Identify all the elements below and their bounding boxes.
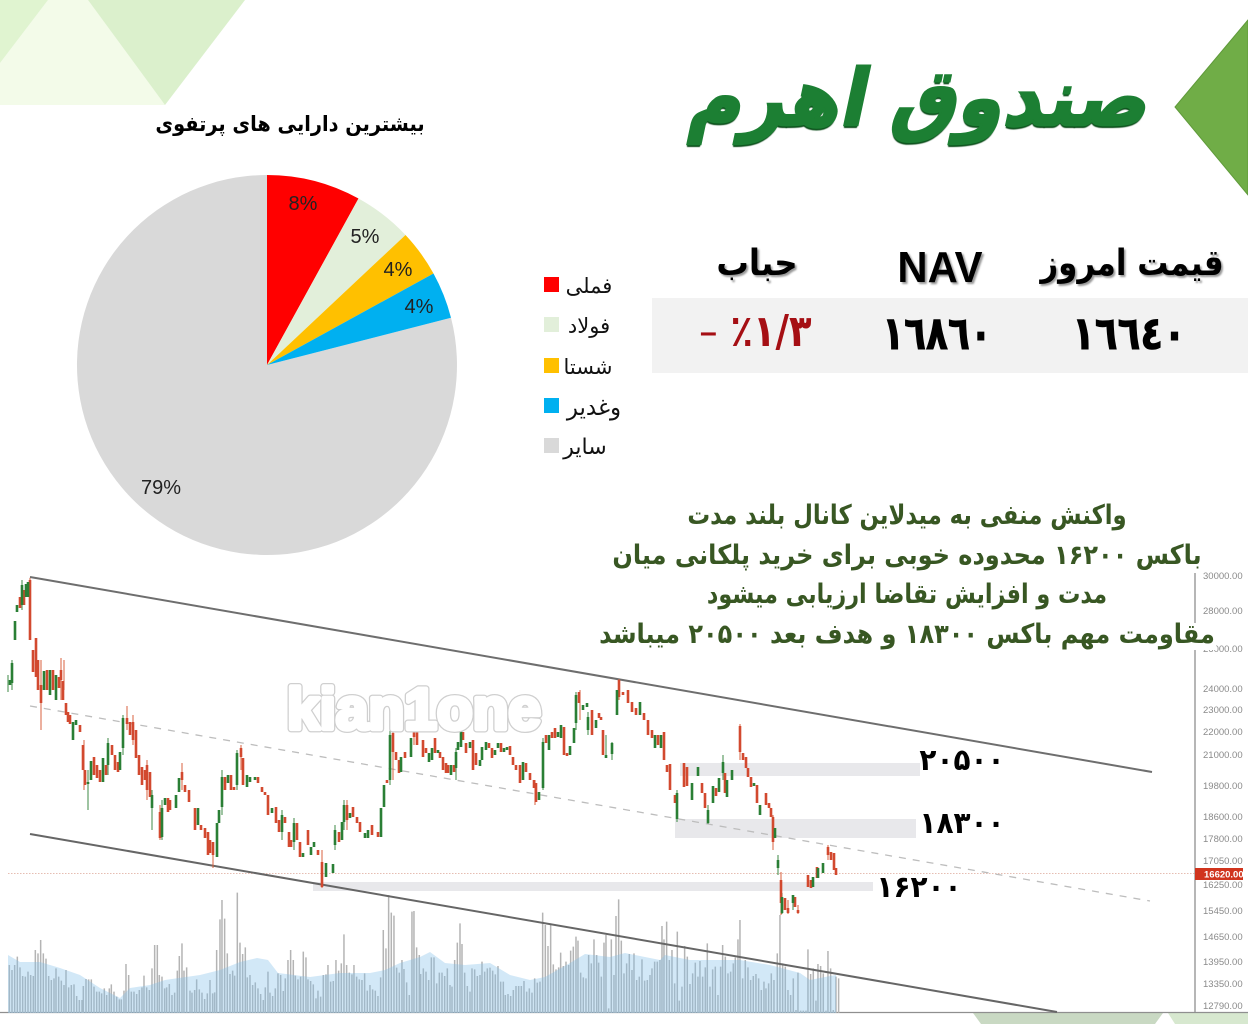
header: bubble: حباب xyxy=(716,243,798,284)
support and resistance zones xyxy=(313,763,920,891)
white cover behind commentary last line xyxy=(1100,623,1216,650)
price axis labels: 16250.00 xyxy=(1203,880,1243,891)
chart axes xyxy=(0,573,1248,1012)
slice: Femeli 8% xyxy=(267,175,358,365)
value: bubble: ٪۱/۳ – xyxy=(699,306,812,357)
pie percentage labels: 5% xyxy=(351,226,380,248)
price axis labels: 17050.00 xyxy=(1203,856,1243,867)
candlestick green bodies xyxy=(10,582,823,913)
price axis labels: 21000.00 xyxy=(1203,750,1243,761)
pie chart heading: بیشترین دارایی های پرتفوی xyxy=(155,112,425,136)
stats table xyxy=(652,243,1248,373)
analysis commentary xyxy=(599,500,1215,650)
pie legend: وغدیر xyxy=(567,395,621,421)
pie legend: فملی xyxy=(566,274,612,298)
header: NAV: NAV xyxy=(897,243,983,292)
slice: other 79% xyxy=(77,175,457,555)
analysis commentary: مدت و افزایش تقاضا ارزیابی میشود xyxy=(707,579,1107,610)
price axis labels: 14650.00 xyxy=(1203,932,1243,943)
analysis commentary: مقاومت مهم باکس ۱۸۳۰۰ و هدف بعد ۲۰۵۰۰ میباشد xyxy=(599,619,1215,650)
pie percentage labels xyxy=(141,193,434,499)
price axis labels: 17800.00 xyxy=(1203,834,1243,845)
price axis labels: 28000.00 xyxy=(1203,606,1243,617)
pie percentage labels: 79% xyxy=(141,477,181,499)
pie legend: فولاد xyxy=(568,314,610,338)
price axis labels: 13350.00 xyxy=(1203,979,1243,990)
candlestick red bodies xyxy=(20,580,836,913)
decorative green diamond right xyxy=(1174,19,1248,196)
price axis labels: 15450.00 xyxy=(1203,906,1243,917)
decorative bottom triangles xyxy=(973,1013,1248,1024)
current price tag: 16620.00 xyxy=(1204,870,1244,880)
value: today's price: ١٦٦٤٠ xyxy=(1072,306,1186,360)
current price dotted line xyxy=(8,872,1195,874)
watermark: kian1one xyxy=(287,677,541,742)
level label 20500: ۲۰۵۰۰ xyxy=(919,743,1005,778)
pie percentage labels: 8% xyxy=(289,193,318,215)
slice: Vaghadir 4% xyxy=(267,274,451,365)
pie legend: شستا xyxy=(563,355,613,379)
price axis labels: 30000.00 xyxy=(1203,571,1243,582)
price axis labels xyxy=(1203,571,1243,1012)
level label 16200: ۱۶۲۰۰ xyxy=(876,870,962,905)
header: today's price: قیمت امروز xyxy=(1040,243,1224,284)
pie legend xyxy=(544,274,621,460)
watermark: kian1one xyxy=(287,677,541,742)
price axis labels: 24000.00 xyxy=(1203,684,1243,695)
decorative green triangles top-left xyxy=(0,0,245,105)
value: NAV: ١٦٨٦٠ xyxy=(882,306,992,360)
pie percentage labels: 4% xyxy=(384,259,413,281)
level label 18300: ۱۸۳۰۰ xyxy=(919,806,1005,841)
slice: Shasta 4% xyxy=(267,235,434,365)
volume average area xyxy=(8,952,836,1013)
slice: Foolad 5% xyxy=(267,198,406,365)
price axis labels: 22000.00 xyxy=(1203,727,1243,738)
pie percentage labels: 4% xyxy=(405,296,434,318)
price axis labels: 18600.00 xyxy=(1203,812,1243,823)
title: صندوق اهرم xyxy=(682,54,1162,144)
analysis commentary: واکنش منفی به میدلاین کانال بلند مدت xyxy=(687,500,1127,531)
stats band xyxy=(652,298,1248,373)
price axis labels: 13950.00 xyxy=(1203,957,1243,968)
pie legend: سایر xyxy=(563,435,607,460)
price axis labels: 26000.00 xyxy=(1203,644,1243,655)
price axis labels: 12790.00 xyxy=(1203,1001,1243,1012)
price axis labels: 19800.00 xyxy=(1203,781,1243,792)
price axis labels: 23000.00 xyxy=(1203,705,1243,716)
volume bars xyxy=(9,893,839,1013)
candlestick wicks xyxy=(8,578,828,915)
analysis commentary: باکس ۱۶۲۰۰ محدوده خوبی برای خرید پلکانی میان xyxy=(612,540,1202,571)
pie chart xyxy=(77,175,457,555)
channel lines xyxy=(30,577,1152,1012)
